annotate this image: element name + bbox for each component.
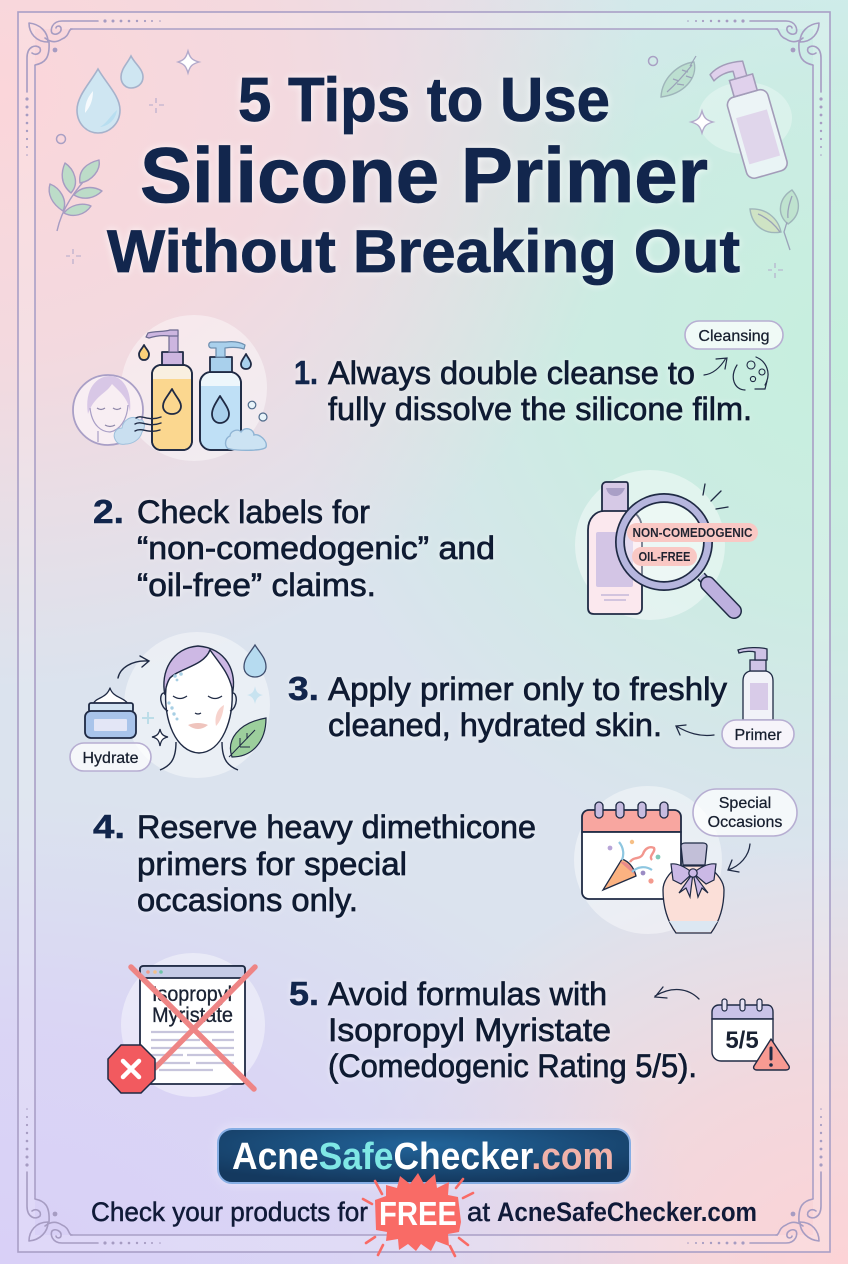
icon: comedogenic rating calendar with warning [655,987,789,1070]
tip 5: Avoid formulas with [328,976,607,1012]
tip 1: Always double cleanse to [328,355,695,391]
tip 2: “oil-free” claims. [137,567,376,603]
illustration: hydrated face [70,632,270,778]
header decoration: water drops and sparkles [56,51,199,264]
tip 3: Apply primer only to freshly [328,671,727,707]
tip 3: 3. [288,670,319,707]
tip 5 [289,975,697,1084]
tip 4: Reserve heavy dimethicone [137,809,536,845]
illustration: magnifier on product label: NON-COMEDOGENIC [632,525,753,540]
tip 4 [93,808,536,918]
tip 1 [294,354,752,427]
tip 1: 1. [294,354,318,391]
illustration: crossed out ingredient list: Isopropyl [152,983,232,1006]
tip 5: 5. [289,975,319,1012]
label: primer with bottle [676,648,794,748]
icon: comedogenic rating calendar with warning: 5/5 [725,1027,759,1054]
illustration: crossed out ingredient list [108,953,265,1097]
call to action line with free burst: Check your products for [91,1197,368,1227]
tip 2 [93,493,495,603]
website badge: AcneSafeChecker.com [232,1136,614,1178]
illustration: magnifier on product label: OIL-FREE [638,549,691,564]
label: cleansing: Cleansing [698,328,770,345]
illustration: special occasion calendar and perfume [574,786,797,934]
tip 5: (Comedogenic Rating 5/5). [328,1048,697,1084]
tip 4: primers for special [137,846,407,882]
tip 2: “non-comedogenic” and [137,530,495,566]
illustration: special occasion calendar and perfume: Special [719,795,771,812]
illustration: hydrated face: Hydrate [82,750,139,767]
tip 5: Isopropyl Myristate [328,1012,611,1048]
call to action line with free burst: FREE [379,1195,457,1232]
title [107,66,740,285]
label: primer with bottle: Primer [734,727,782,744]
header decoration: left leaf sprig [49,160,102,231]
illustration: magnifier on product label [575,470,758,620]
tip 4: occasions only. [137,882,358,918]
call to action line with free burst [91,1173,757,1256]
illustration: special occasion calendar and perfume: Occasions [708,814,782,831]
title: 5 Tips to Use [238,66,610,135]
tip 3: cleaned, hydrated skin. [328,707,662,743]
tip 3 [288,670,727,743]
tip 2: 2. [93,493,124,530]
call to action line with free burst: AcneSafeChecker.com [497,1197,757,1227]
call to action line with free burst: at [467,1197,490,1227]
title: Silicone Primer [140,131,708,219]
title: Without Breaking Out [107,218,740,285]
tip 1: fully dissolve the silicone film. [328,391,752,427]
header decoration: right leaves, sparkles and primer bottle [648,55,798,278]
label: cleansing [685,321,783,390]
illustration: crossed out ingredient list: Myristate [152,1004,233,1027]
tip 2: Check labels for [137,494,370,530]
tip 4: 4. [93,808,125,845]
illustration: double cleanse [73,315,267,461]
